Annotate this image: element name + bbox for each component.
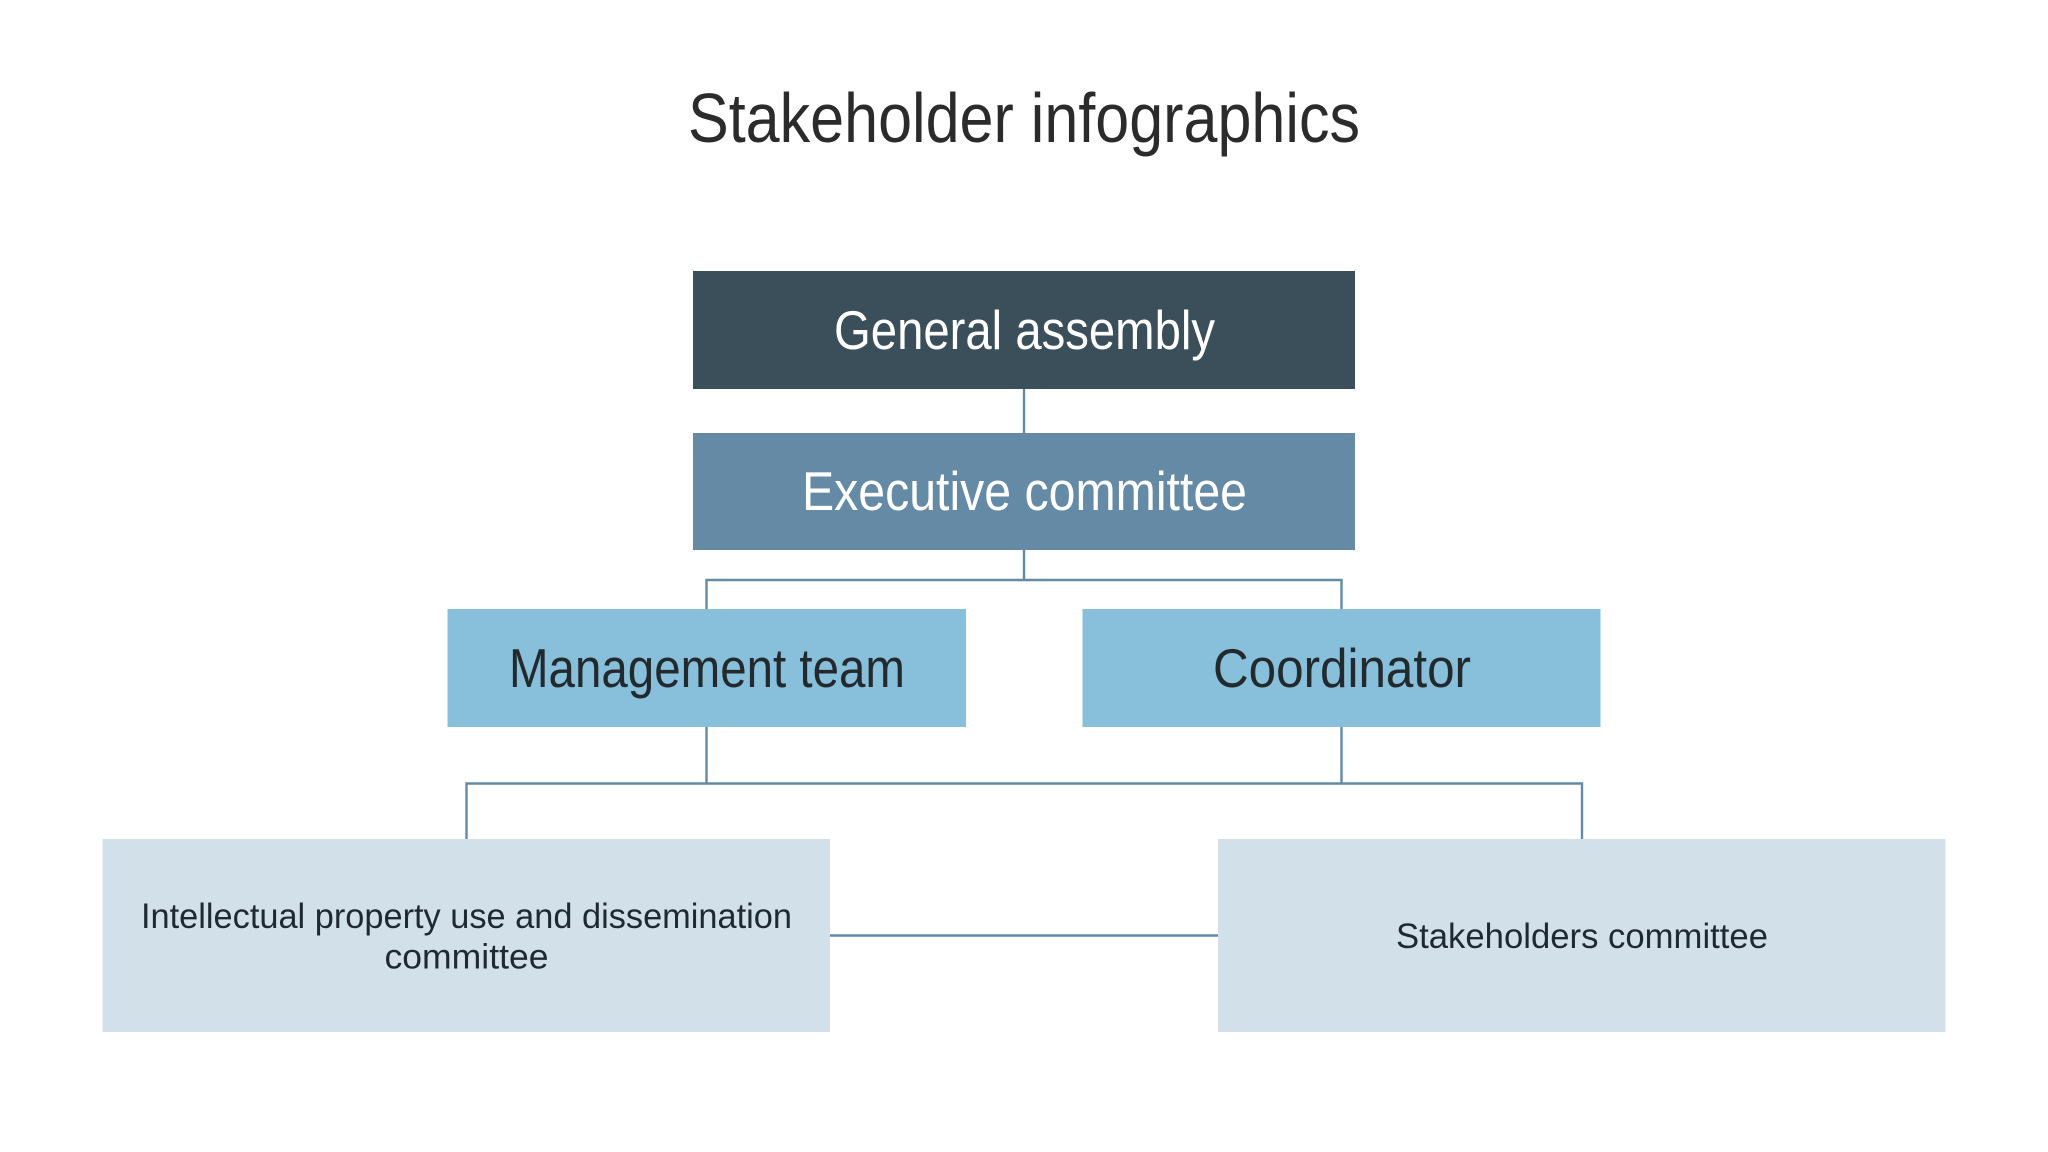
box: coordinator: Coordinator — [1213, 637, 1471, 699]
box: general assembly: General assembly — [834, 299, 1215, 361]
box: general assembly — [693, 271, 1355, 389]
box: executive committee: Executive committee — [802, 460, 1247, 522]
connector: management team and coordinator to lower committees — [466, 727, 1582, 839]
box: coordinator — [1082, 609, 1600, 727]
box: management team — [448, 609, 966, 727]
box: stakeholders committee: Stakeholders committee — [1396, 917, 1768, 956]
box: intellectual property committee — [102, 839, 830, 1032]
title: Stakeholder infographics — [688, 79, 1360, 157]
box: management team: Management team — [509, 637, 905, 699]
connector: between lower committees — [830, 934, 1218, 937]
box: intellectual property committee: Intellectual property use and dissemination — [141, 897, 792, 936]
box: stakeholders committee — [1218, 839, 1946, 1032]
connector: executive committee to management team and coordinator — [706, 550, 1342, 609]
connector: general assembly to executive committee — [1023, 389, 1025, 433]
box: executive committee — [693, 433, 1355, 550]
box: intellectual property committee: committee — [384, 938, 548, 976]
